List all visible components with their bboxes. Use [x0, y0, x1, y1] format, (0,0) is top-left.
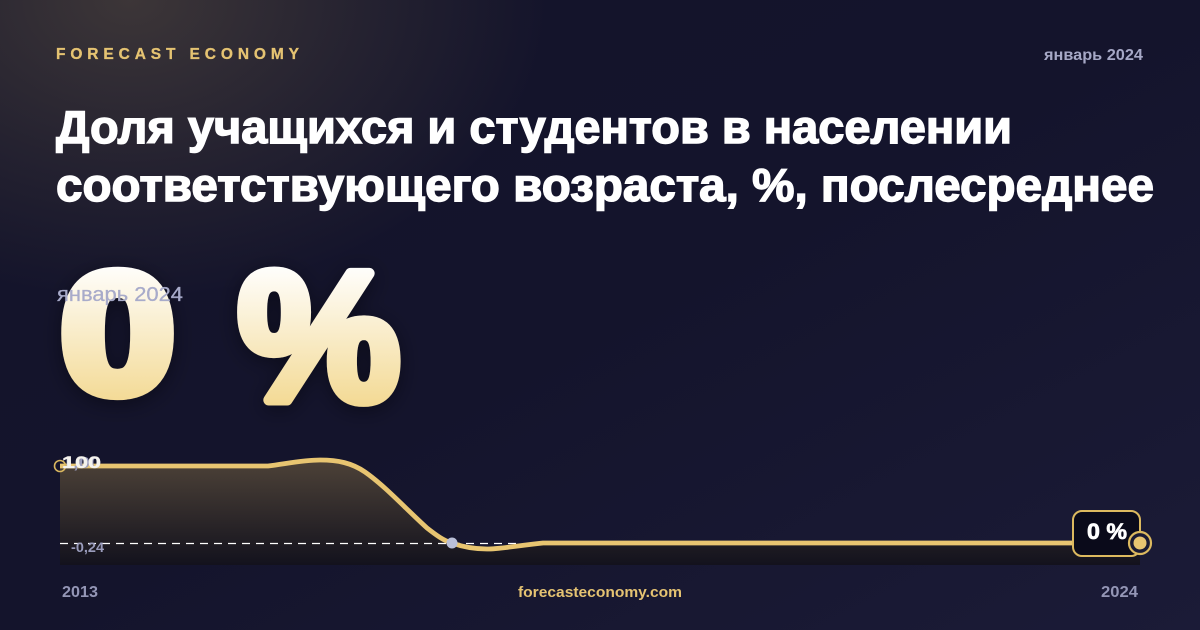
title: Доля учащихся и студентов в населении: [56, 101, 1012, 153]
min label: -0,24: [71, 539, 104, 555]
title: соответствующего возраста, %, послесреднее: [56, 159, 1154, 211]
source url: forecasteconomy.com: [518, 584, 682, 601]
area under curve: [60, 460, 1140, 565]
latest value callout: 0 %: [1087, 519, 1127, 544]
title: [56, 101, 1154, 211]
big value: %: [238, 233, 400, 439]
big value: [61, 233, 400, 439]
end year: 2024: [1101, 584, 1138, 601]
start marker: [54, 460, 66, 472]
latest value callout: [1073, 511, 1140, 556]
big value: 0: [61, 238, 174, 428]
zero dashed line: [60, 542, 517, 544]
start value: 100: [62, 453, 101, 472]
date top right: январь 2024: [1043, 47, 1143, 64]
line chart: [54, 453, 1151, 565]
date over big value: январь 2024: [57, 284, 183, 306]
minimum marker: [446, 538, 458, 548]
end marker: [1129, 532, 1151, 554]
start year: 2013: [62, 584, 98, 601]
data line: [60, 460, 1140, 549]
max label: 1,00: [62, 455, 101, 472]
brand label: FORECAST ECONOMY: [56, 46, 300, 63]
